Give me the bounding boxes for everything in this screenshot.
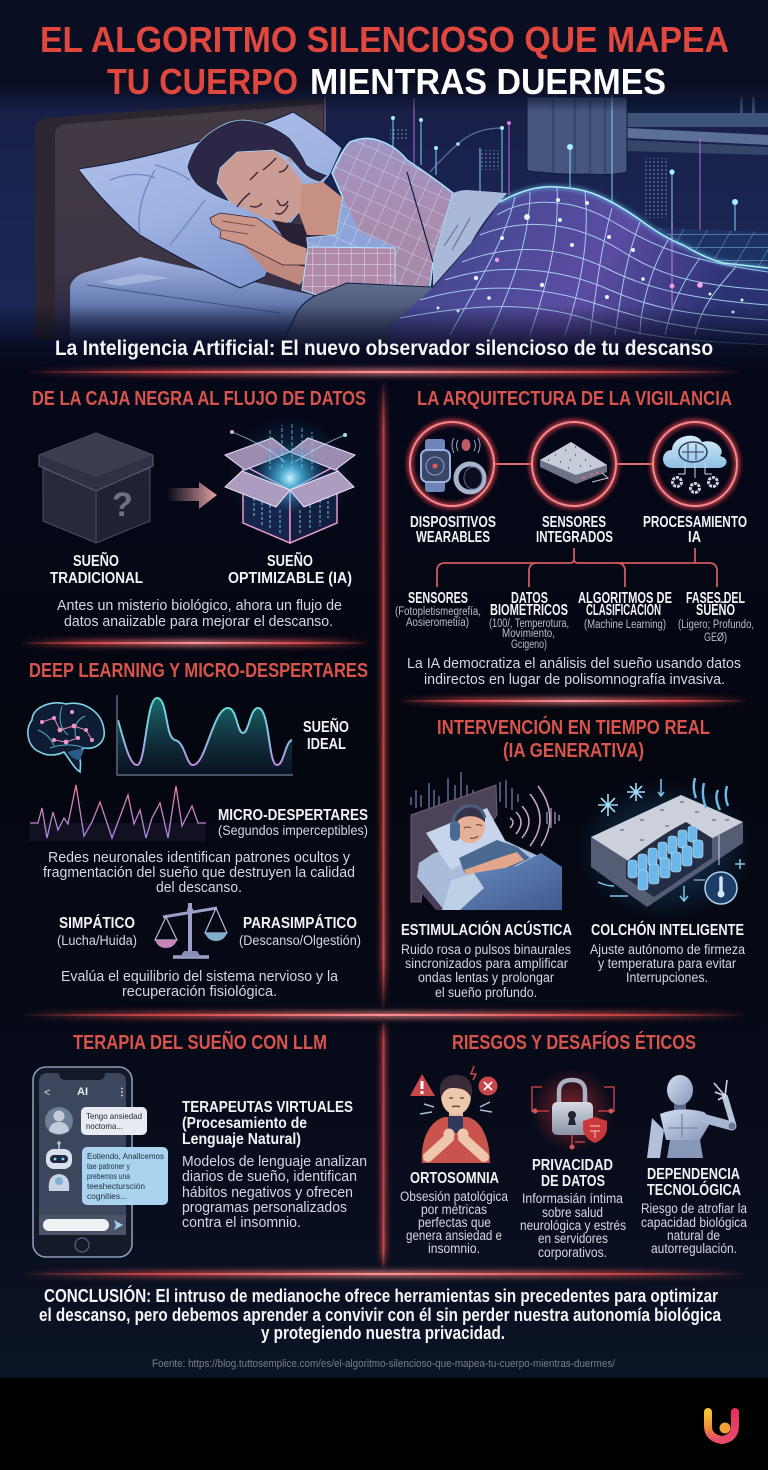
sub-label: sensores [395,590,481,629]
heading: RIESGOS Y DESAFÍOS ÉTICOS [452,1031,696,1054]
sub-label: datos biométricos: Gcigeno) [511,639,547,651]
illustration: smart mattress [575,778,755,920]
label: parasimpático [239,913,361,948]
text block: terapeutas virtuales: Lenguaje Natural) [182,1131,301,1148]
card: ortosomnia: genera ansiedad e [406,1228,502,1243]
card: dependencia tecnológica: autorregulación. [651,1241,737,1256]
data signal lines [391,95,738,312]
card: privacidad de datos [520,1157,626,1260]
chart: micro-awakenings signal [30,785,206,841]
label: sueño optimizable [228,550,352,587]
sub-label: datos biométricos: (100/, Temperotura, [489,618,569,630]
sub-label: algoritmos de clasificación [578,590,672,631]
icon: humanoid robot [647,1075,736,1158]
phone chat illustration: ⋮ [117,1087,127,1098]
body text: indirectos en lugar de polisomnografía invasiva. [424,671,725,688]
phone chat illustration: Tengo ansiedad [86,1111,142,1121]
text block: mattress: Interrupciones. [626,970,708,985]
sub-label: sensores: Aosierometiía) [406,617,469,629]
card: ortosomnia: insomnio. [428,1241,480,1256]
hand [210,213,307,265]
card: dependencia tecnológica: natural de [667,1228,720,1243]
labels: three stages [410,514,747,546]
body text: Evalúa el equilibrio del sistema nervioso y la [61,968,339,985]
body text: fragmentación del sueño que destruyen la calidad [43,864,355,881]
phone chat illustration: tae patroner y [87,1162,130,1171]
illustration: man with headphones in bed [411,772,562,910]
body text: Redes neuronales identifican patrones ocultos y [48,849,350,866]
card: privacidad de datos: neurológica y estrés [520,1218,626,1233]
label: sueño optimizable: OPTIMIZABLE (IA) [228,570,352,587]
card: dependencia tecnológica: capacidad biológica [641,1215,747,1230]
card: ortosomnia [400,1170,508,1256]
icon: black box [39,433,153,543]
text block: terapeutas virtuales: TERAPEUTAS VIRTUALES [182,1099,353,1116]
phone chat illustration: AI [77,1086,88,1098]
label: sueño ideal [303,716,349,753]
text block: terapeutas virtuales: programas personalizados [182,1199,347,1216]
panel: de la caja negra al flujo de datos [32,388,366,630]
sheet fold [282,190,507,345]
hair [187,120,328,202]
card: dependencia tecnológica: Riesgo de atrofiar la [641,1201,747,1216]
sleeve with mesh [302,247,395,295]
chart: ideal sleep wave [117,695,293,775]
text block: mattress [590,942,745,985]
icon: cloud AI [663,436,727,492]
text block: acoustic: sincronizados para amplificar [405,956,568,971]
label: simpático: (Lucha/Huida) [57,933,137,948]
icon: watch and ring [421,438,484,492]
label: sueño tradicional: SUEÑO [73,550,119,570]
subtitle: La Inteligencia Artificial: El nuevo observador silencioso de tu descanso [55,337,713,360]
phone chat illustration: Eotiendo, Anallcemos [87,1152,164,1161]
logo [708,1412,735,1440]
panel: deep learning y micro-despertares [28,660,368,1000]
conclusion [39,1285,722,1343]
label: sueño optimizable: SUEÑO [267,550,313,570]
heading: INTERVENCIÓN EN TIEMPO REAL [437,715,710,739]
label: simpático: SIMPÁTICO [59,913,135,932]
phone chat illustration: < [44,1087,50,1099]
label: simpático [57,913,137,948]
source line: Foente: https://blog.tuttosemplice.com/es/el-algoritmo-silencioso-que-mapea-tu-cuerpo-mientras-duermes/ [152,1358,616,1370]
icon: balance scale [155,903,227,957]
text block: acoustic: el sueño profundo. [435,985,537,1000]
heading: DEEP LEARNING Y MICRO-DESPERTARES [29,660,368,682]
card: ortosomnia: Obsesión patológica [400,1189,508,1204]
text block: acoustic [401,942,571,1000]
labels: three stages: INTEGRADOS [536,529,613,546]
title: MIENTRAS DUERMES [310,61,666,102]
card: ortosomnia: perfectas que [418,1215,491,1230]
arrow [167,482,217,509]
hero illustration: woman sleeping with data mesh [0,90,768,354]
card: ortosomnia: por métricas [421,1202,487,1217]
text block: terapeutas virtuales: (Procesamiento de [182,1115,307,1132]
text block: terapeutas virtuales: hábitos negativos y ofrecen [182,1184,353,1201]
label: estimulación acústica: ESTIMULACIÓN ACÚSTICA [401,920,572,939]
label: micro-despertares [218,807,368,838]
title: EL ALGORITMO SILENCIOSO QUE MAPEA [40,19,729,60]
label: sueño tradicional [50,550,143,587]
heading [437,715,710,762]
face [217,150,302,223]
label: sueño tradicional: TRADICIONAL [50,570,143,587]
body text: Antes un misterio biológico, ahora un flujo de [57,597,342,614]
title: TU CUERPO [107,61,298,102]
sub-label: fases del sueño: GEØ) [704,632,727,644]
card: dependencia tecnológica [641,1166,747,1256]
body text: La IA democratiza el análisis del sueño usando datos [407,655,741,672]
sub-label: sensores: SENSORES [408,590,468,607]
text block: terapeutas virtuales: contra el insomnio. [182,1214,301,1231]
heading: (IA GENERATIVA) [503,740,644,762]
labels: three stages: IA [688,529,701,546]
lower arm [243,245,310,285]
sub-label: algoritmos de clasificación: (Machine Learning) [584,619,666,631]
card: dependencia tecnológica: TECNOLÓGICA [647,1180,741,1199]
card: privacidad de datos: sobre salud [542,1205,603,1220]
heading: TERAPIA DEL SUEÑO CON LLM [73,1031,327,1054]
window and curtain [527,97,768,175]
text block: acoustic: Ruido rosa o pulsos binaurales [401,942,571,957]
body text: del descanso. [156,879,242,896]
panel: terapia del sueño con LLM [33,1031,367,1257]
icon: lock with shield [530,1068,614,1152]
sub-label: datos biométricos: BIOMETRICOS [490,602,568,619]
bracket connector [437,548,717,587]
text block: mattress: Ajuste autónomo de firmeza [590,942,745,957]
body text [61,968,339,1000]
sub-label: algoritmos de clasificación: CLASIFICACIÓN [586,600,661,619]
sub-label: datos biométricos [489,590,569,651]
icon: open glowing data box [225,416,355,543]
blanket with mesh [385,187,768,345]
sub-label: fases del sueño: (Ligero; Profundo, [678,619,754,631]
card: privacidad de datos: PRIVACIDAD [532,1157,613,1174]
text block: terapeutas virtuales: Modelos de lenguaje analizan [182,1153,367,1170]
text block: acoustic: ondas lentas y prolongar [418,970,554,985]
nightgown with mesh [307,138,453,287]
card: ortosomnia: ORTOSOMNIA [410,1170,499,1187]
label: sueño ideal: SUEÑO [303,716,349,736]
panel: riesgos y desafíos éticos [400,1031,747,1260]
text block: mattress: y temperatura para evitar [598,956,736,971]
mesh dot patches [390,128,667,218]
bed mesh behind blanket [657,228,768,268]
body text [407,655,741,688]
hair under neck [272,220,312,248]
sub-label: algoritmos de clasificación: ALGORITMOS DE [578,590,672,607]
neck [298,182,343,235]
text block: terapeutas virtuales [182,1099,367,1231]
body text: datos anaiizable para mejorar el descanso. [64,613,333,630]
body text [57,597,342,630]
sub-label: sensores: (Fotopletismegrefía, [395,606,481,618]
label: parasimpático: (Descanso/Olgestión) [239,933,361,948]
label: parasimpático: PARASIMPÁTICO [243,913,357,932]
conclusion: y protegiendo nuestra privacidad. [261,1323,505,1343]
card: privacidad de datos: DE DATOS [541,1173,605,1190]
sub-label: datos biométricos: Movimiento, [502,628,555,640]
phone chat illustration [33,1067,168,1257]
phone chat illustration: cognities... [87,1192,127,1201]
labels: three stages: WEARABLES [416,529,490,546]
label: micro-despertares: MICRO-DESPERTARES [218,807,368,824]
phone chat illustration: teeshectursción [87,1182,145,1191]
label: micro-despertares: (Segundos imperceptibles) [218,823,368,838]
phone chat illustration: noctoma... [86,1121,123,1131]
body text [43,849,355,896]
labels: three stages: DISPOSITIVOS [410,514,496,531]
card: privacidad de datos: Informasián íntima [522,1191,623,1206]
sub-label: fases del sueño: SUEÑO [696,599,735,619]
panel: la arquitectura de la vigilancia [395,388,754,688]
circle nodes [410,422,737,506]
pillow [78,112,342,288]
card: dependencia tecnológica: DEPENDENCIA [647,1166,740,1183]
icon: anxious person with phone [410,1066,498,1163]
icon: sensor mattress [540,442,608,484]
mattress [70,257,313,345]
heading: DE LA CAJA NEGRA AL FLUJO DE DATOS [32,388,366,410]
label: sueño ideal: IDEAL [307,736,346,753]
labels: three stages: SENSORES [542,514,606,531]
sub-label: datos biométricos: DATOS [511,590,548,607]
connectors between circles [494,463,653,465]
headboard [35,97,325,340]
panel: intervención en tiempo real [401,715,755,1000]
icon: black box: ? [112,486,133,524]
body text: recuperación fisiológica. [122,983,277,1000]
card: privacidad de datos: corporativos. [538,1245,607,1260]
text block: terapeutas virtuales: diarios de sueño, identifican [182,1168,357,1185]
phone chat illustration: prebemos una [87,1172,130,1181]
icon: neural brain [28,703,104,772]
sub-label: fases del sueño [678,590,754,644]
title [40,19,729,102]
card: privacidad de datos: en servidores [538,1231,608,1246]
